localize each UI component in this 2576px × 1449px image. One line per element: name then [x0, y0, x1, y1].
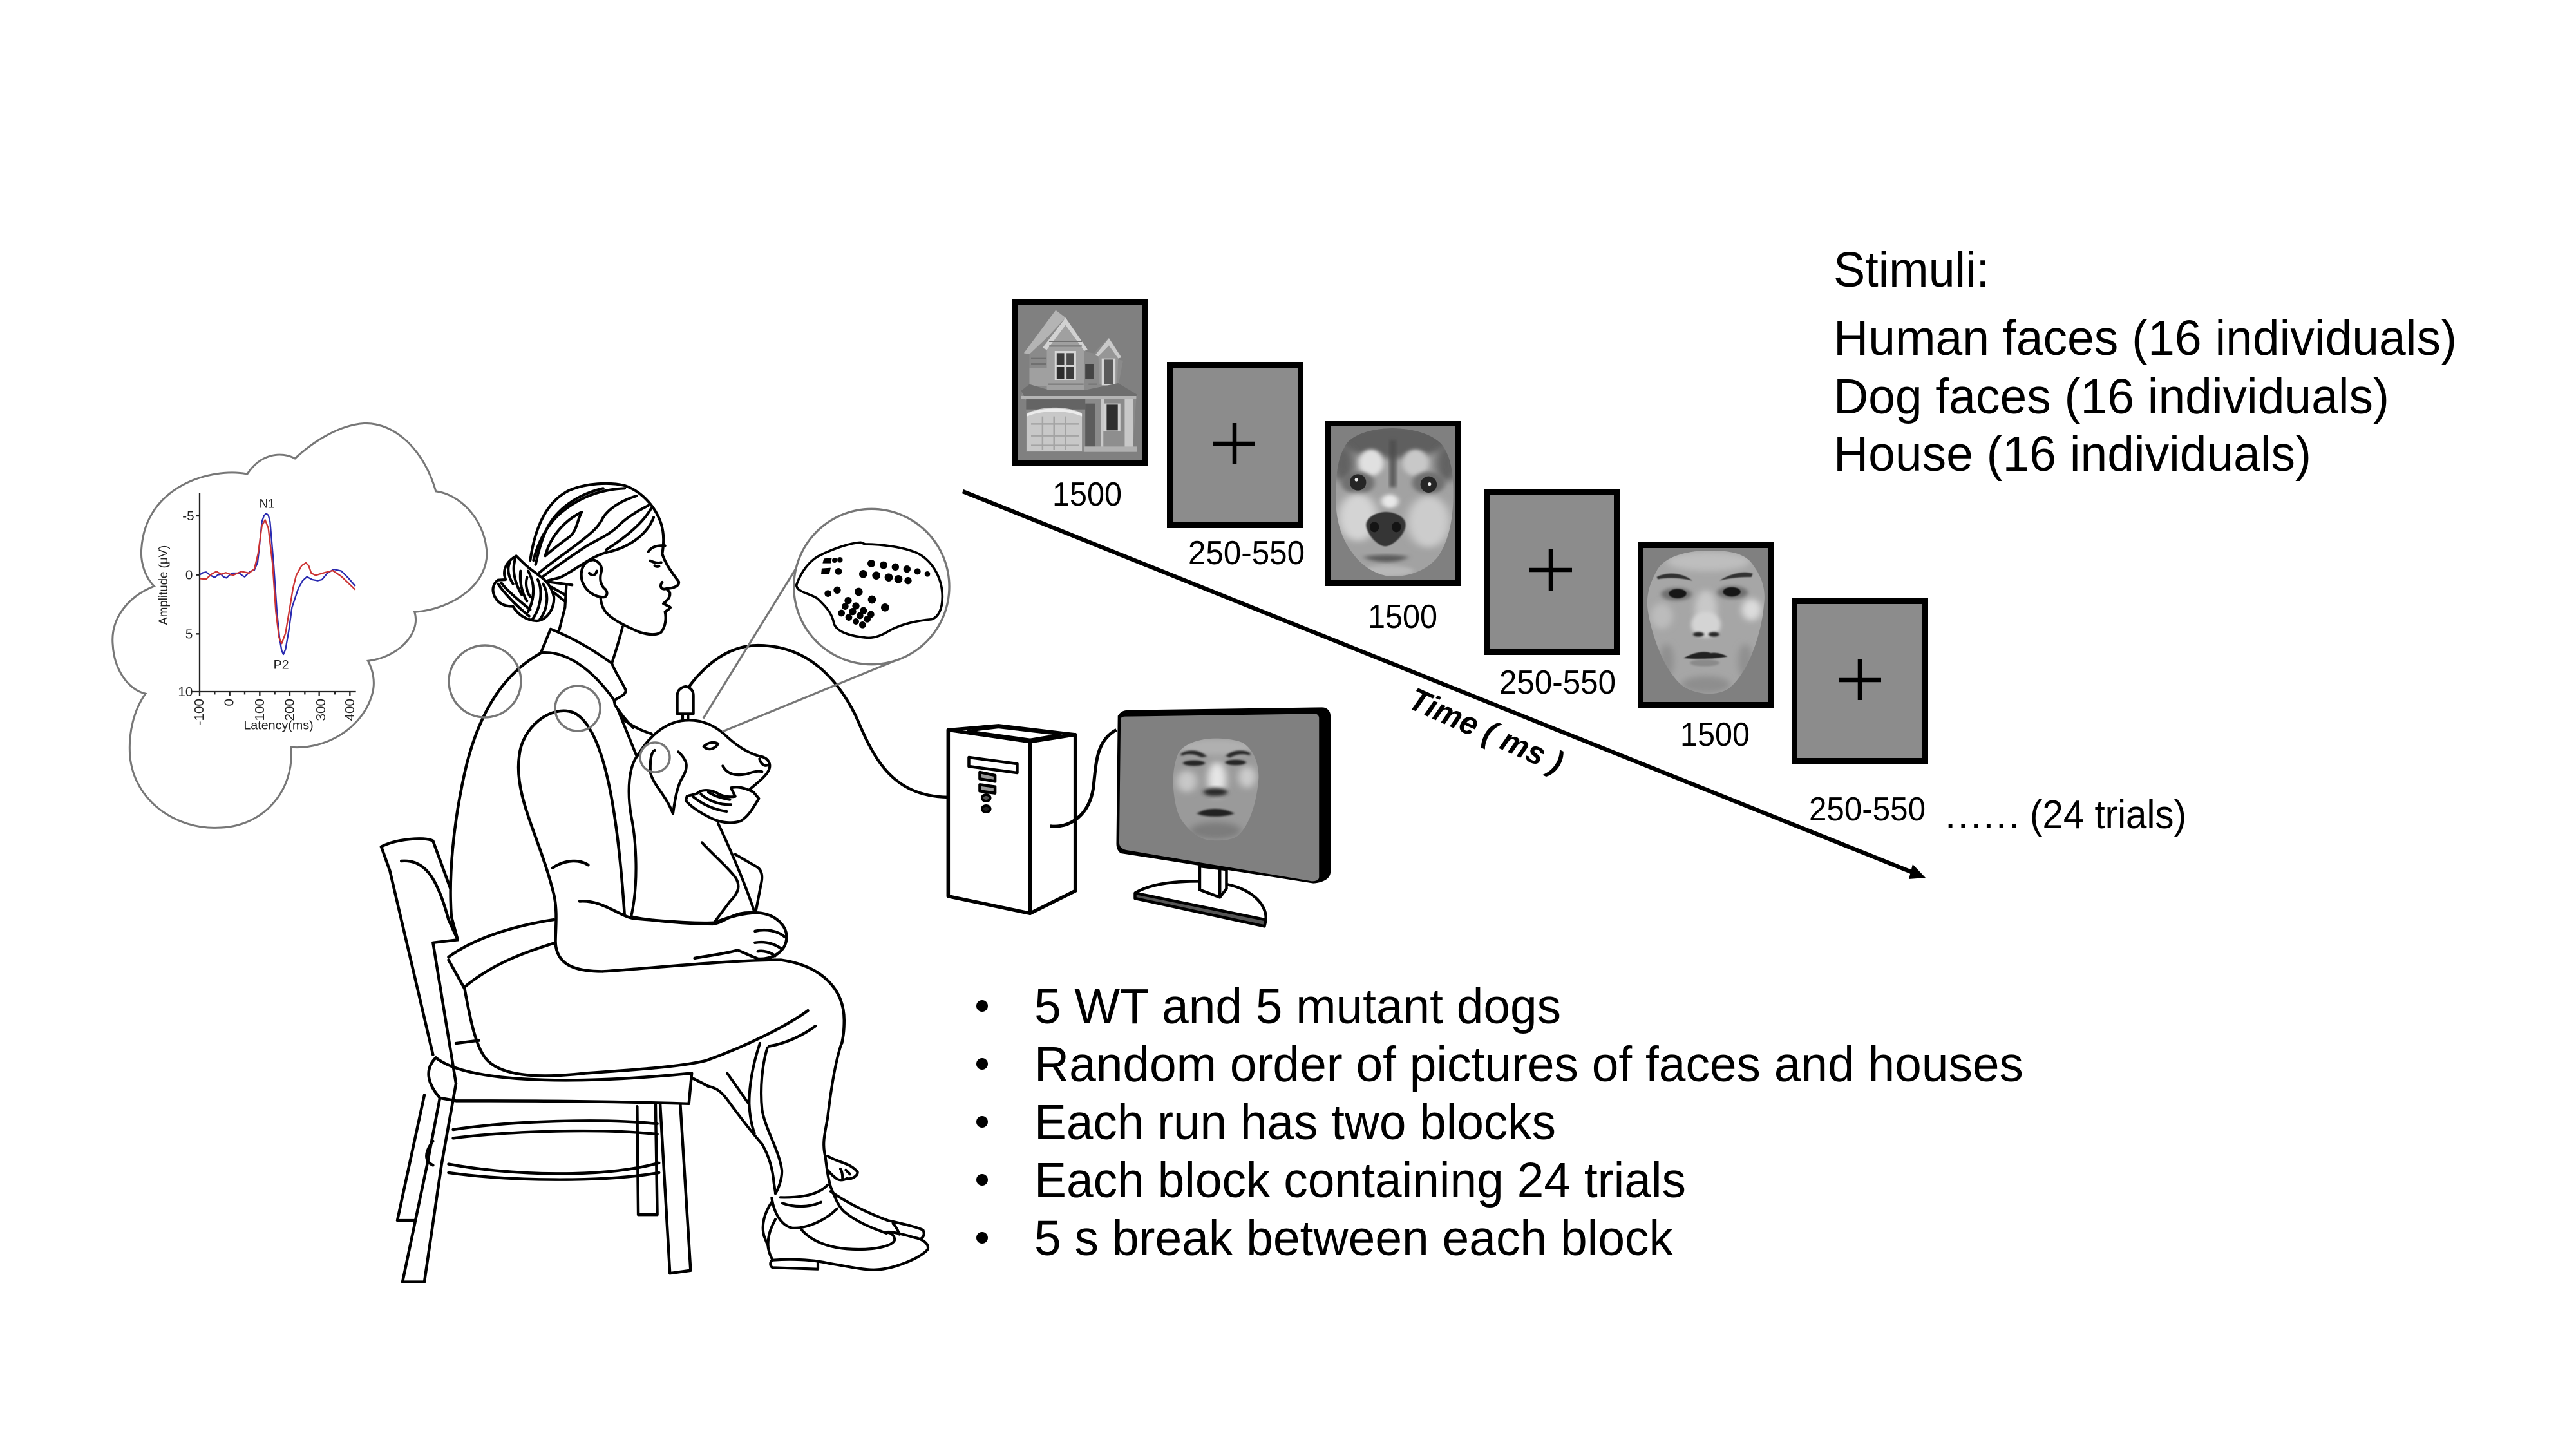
stimuli text block: House (16 individuals) — [1833, 426, 2311, 482]
computer tower — [948, 726, 1116, 913]
ERP chart: 300 — [314, 699, 328, 721]
human face picture — [1647, 551, 1765, 694]
ERP chart: -5 — [182, 509, 194, 524]
stimuli text block — [1833, 242, 2457, 482]
stimuli text block: Stimuli: — [1833, 242, 1989, 298]
ERP chart: -100 — [192, 699, 207, 725]
trials note: ...... — [1945, 793, 2020, 837]
ERP chart: Latency(ms) — [243, 719, 314, 733]
lower legs, shoes and dog paw — [708, 1043, 928, 1270]
dog on lap — [618, 710, 770, 924]
ERP chart: 5 — [185, 627, 193, 641]
woman: head, hair and collar — [493, 484, 679, 728]
trial frame: fixation cross — [1484, 489, 1620, 655]
ERP chart: Amplitude (μV) — [157, 545, 171, 625]
ERP chart: 100 — [252, 699, 267, 721]
protocol bullet list: Each block containing 24 trials — [1034, 1153, 1686, 1208]
protocol bullet list — [976, 979, 2023, 1266]
duration label 1500: 1500 — [1052, 476, 1122, 513]
ERP chart: N1 — [260, 497, 275, 511]
trial frame: fixation cross — [1167, 362, 1303, 528]
cloud outline — [113, 423, 487, 828]
trial frame: house — [1012, 299, 1148, 466]
ERP chart: 10 — [178, 685, 193, 699]
trial frame: fixation cross — [1792, 598, 1928, 764]
trials note: (24 trials) — [2030, 793, 2186, 837]
monitor with face — [1116, 707, 1331, 926]
ERP chart: P2 — [274, 658, 289, 672]
protocol bullet list: Random order of pictures of faces and houses — [1034, 1037, 2023, 1092]
gray highlight circles on shoulder and dog — [449, 645, 670, 772]
zoom cone lines from dog head to inset — [703, 560, 902, 732]
duration label 1500: 1500 — [1368, 598, 1437, 636]
EEG electrode and cable — [677, 645, 947, 797]
trial frame: human face — [1638, 542, 1774, 708]
house picture — [1021, 310, 1138, 452]
person on chair holding dog — [381, 484, 928, 1282]
trials note — [1945, 793, 2186, 837]
ERP chart: 200 — [283, 699, 298, 721]
protocol bullet list: 5 WT and 5 mutant dogs — [1034, 979, 1561, 1034]
cable to monitor — [1050, 730, 1116, 826]
stimuli text block: Human faces (16 individuals) — [1833, 310, 2457, 366]
thought cloud with ERP plot — [113, 423, 487, 828]
time arrow — [963, 491, 1926, 879]
ERP chart: 0 — [222, 699, 237, 706]
ERP chart: 0 — [185, 568, 193, 583]
duration label 1500: 1500 — [1680, 716, 1750, 753]
dog face picture — [1336, 428, 1453, 576]
duration label 250-550: 250-550 — [1499, 664, 1616, 701]
trial frame: dog face — [1325, 421, 1464, 586]
monitor stand — [1135, 866, 1266, 926]
duration label 250-550: 250-550 — [1188, 535, 1305, 572]
inset: electrode layout on dog head — [794, 509, 949, 665]
ERP chart — [157, 493, 357, 733]
chair — [381, 838, 692, 1282]
woman: torso, arm and thigh — [448, 652, 844, 1086]
ERP chart: 400 — [343, 699, 357, 721]
protocol bullet list: 5 s break between each block — [1034, 1211, 1673, 1266]
stimuli text block: Dog faces (16 individuals) — [1833, 369, 2389, 424]
face on screen — [1173, 738, 1258, 840]
protocol bullet list: Each run has two blocks — [1034, 1095, 1556, 1150]
time axis label: Time ( ms ) — [1404, 681, 1569, 781]
duration label 250-550: 250-550 — [1809, 791, 1926, 828]
hand under dog chin — [686, 787, 759, 822]
